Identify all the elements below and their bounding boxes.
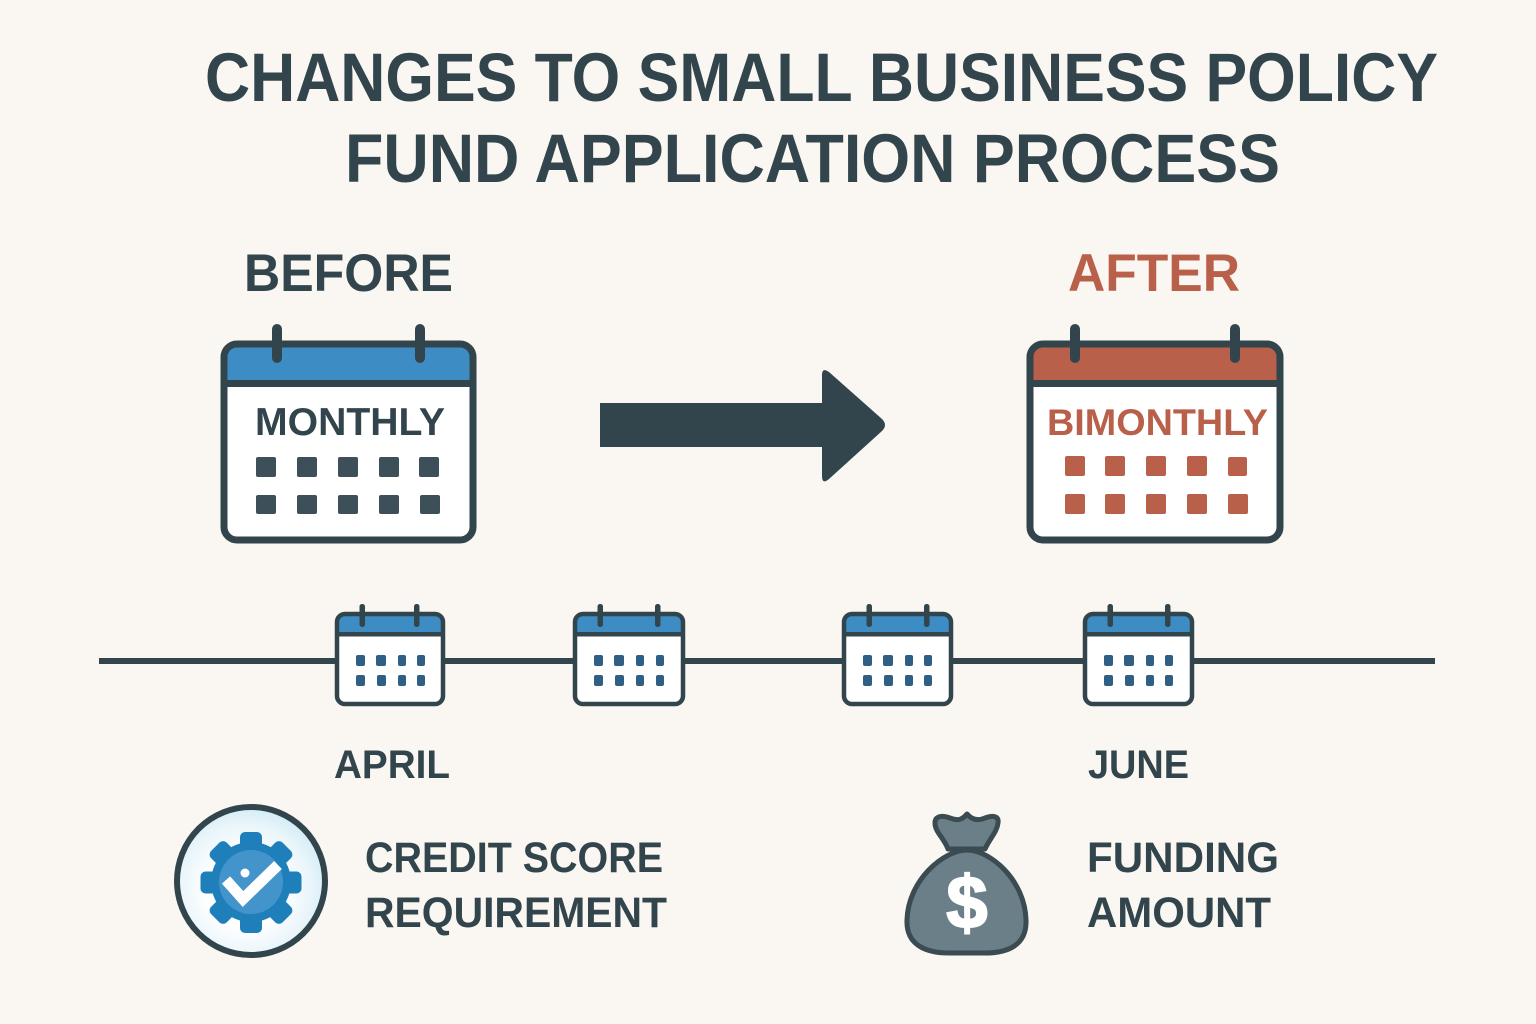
timeline calendar: june xyxy=(1085,604,1192,704)
label: funding amount: FUNDING xyxy=(1087,834,1279,882)
timeline calendar: third xyxy=(844,604,951,704)
label: funding amount: AMOUNT xyxy=(1087,889,1271,937)
timeline calendar: second xyxy=(575,604,683,704)
title: CHANGES TO SMALL BUSINESS POLICY xyxy=(205,39,1438,116)
label: june: JUNE xyxy=(1088,743,1189,787)
icon: bimonthly calendar xyxy=(1030,324,1280,540)
icon: money bag xyxy=(907,814,1026,953)
icon: monthly calendar: MONTHLY xyxy=(255,401,445,444)
icon: monthly calendar xyxy=(224,324,473,540)
label: credit score requirement: REQUIREMENT xyxy=(365,889,667,937)
icon: money bag: $ xyxy=(946,861,988,944)
title: FUND APPLICATION PROCESS xyxy=(345,120,1280,197)
timeline calendar: april xyxy=(337,604,443,704)
label: april: APRIL xyxy=(334,743,450,787)
label: credit score requirement xyxy=(365,834,667,937)
icon: bimonthly calendar: BIMONTHLY xyxy=(1047,402,1268,443)
heading: before: BEFORE xyxy=(244,244,453,303)
label: funding amount xyxy=(1087,834,1279,937)
icon: credit score gear badge xyxy=(177,807,325,955)
timeline line xyxy=(99,658,1435,664)
label: credit score requirement: CREDIT SCORE xyxy=(365,834,663,882)
heading: after: AFTER xyxy=(1068,244,1240,303)
title xyxy=(205,39,1438,197)
arrow: before to after xyxy=(600,370,885,481)
